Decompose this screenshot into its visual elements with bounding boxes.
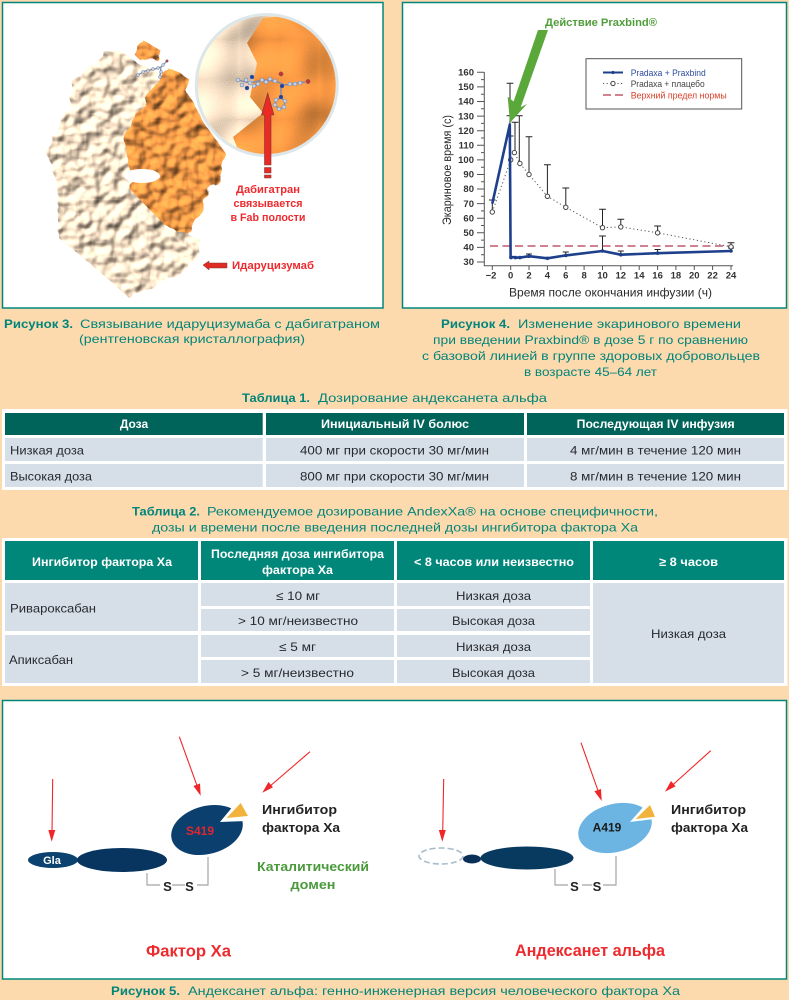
y tick labels: 30 (463, 257, 474, 268)
Gla domain: Gla (43, 855, 62, 867)
chart axes (477, 72, 733, 270)
x tick labels: −2 (486, 270, 496, 282)
table 1 rows: 800 мг при скорости 30 мг/мин (300, 470, 489, 484)
label: dabigatran binding: в Fab полости (230, 212, 306, 224)
table 2 rows: ≤ 10 мг (276, 589, 321, 603)
y tick labels: 80 (463, 184, 474, 195)
EGF domain (480, 846, 574, 870)
disulfide bond: S (593, 879, 602, 894)
table 2 rows: Высокая доза (452, 666, 535, 680)
table 2 header: Ингибитор фактора Ха (32, 555, 172, 569)
EGF domain (77, 848, 167, 872)
label: catalytic domain: Каталитический (257, 859, 369, 874)
table 2 title (132, 504, 658, 534)
line: upper limit of normal (490, 245, 730, 247)
Gla domain (28, 852, 78, 868)
y tick labels: 70 (463, 199, 474, 210)
table 1 rows (5, 438, 784, 487)
arrow: red arrow into pocket (262, 93, 274, 178)
y tick labels: 100 (458, 155, 474, 166)
table 2 rows: > 10 мг/неизвестно (238, 614, 358, 628)
table 1 rows: 4 мг/мин в течение 120 мин (570, 444, 741, 458)
x tick labels: 2 (526, 270, 532, 282)
table 1 rows: Высокая доза (10, 470, 92, 484)
table 2 rows: Низкая доза (456, 589, 531, 603)
y tick labels: 90 (463, 170, 474, 181)
y tick labels: 150 (458, 82, 474, 93)
caption: figure 5: Рисунок 5. (111, 984, 180, 998)
table 2 title: Рекомендуемое дозирование AndexXa® на основе специфичности, (207, 504, 658, 518)
table 1 title: Таблица 1. (242, 391, 310, 405)
table 2 rows: Низкая доза (456, 640, 531, 654)
diagram: factor Xa (28, 737, 369, 960)
table 2 header (5, 541, 784, 580)
catalytic domain S419 (166, 797, 250, 863)
disulfide bond: S (570, 879, 579, 894)
protein surface: idarucizumab (47, 40, 225, 297)
line: Pradaxa + Praxbind (492, 124, 733, 260)
catalytic domain A419 (573, 795, 658, 861)
label: idarucizumab: Идаруцизумаб (232, 260, 314, 272)
table 2 rows: Низкая доза (651, 627, 726, 641)
catalytic domain S419: S419 (186, 824, 214, 838)
table 2 header: Последняя доза ингибитора (211, 547, 384, 561)
table 2 header: ≥ 8 часов (659, 555, 718, 569)
y tick labels: 40 (463, 243, 474, 254)
x tick labels: 6 (563, 270, 568, 282)
table 2 rows: > 5 мг/неизвестно (241, 666, 354, 680)
table 1 title (242, 391, 547, 405)
label: factor Xa: Фактор Ха (146, 942, 232, 960)
label: inhibitor: фактора Ха (671, 820, 749, 835)
caption: figure 4: при введении Praxbind® в дозе 5 г по сравнению (433, 333, 748, 347)
label: andexanet alfa: Андексанет альфа (515, 941, 666, 960)
table 1 rows: Низкая доза (10, 444, 84, 458)
disulfide bond (147, 857, 208, 894)
caption: figure 3: Рисунок 3. (4, 317, 73, 331)
y tick labels: 50 (463, 228, 474, 239)
table 1: andexanet dosing (2, 409, 788, 490)
table 1 header: Инициальный IV болюс (321, 417, 469, 431)
panel: figure 5 factor Xa vs andexanet (2, 700, 786, 979)
legend: Pradaxa + Praxbind (631, 68, 706, 79)
catalytic domain A419: A419 (593, 820, 622, 834)
label: inhibitor (671, 802, 749, 835)
table 2 header: фактора Ха (262, 563, 333, 577)
y axis title: Экариновое время (с) (440, 115, 454, 225)
caption: figure 4: с базовой линией в группе здоровых добровольцев (422, 349, 760, 363)
inhibitor wedge (227, 803, 248, 818)
panel: figure 4 ecarin time chart (402, 2, 786, 308)
line: Pradaxa + placebo (490, 150, 733, 249)
x tick labels: 24 (726, 270, 737, 282)
table 2: recommended dosing (2, 538, 788, 686)
molecule in inset (236, 72, 310, 111)
disulfide bond (555, 856, 616, 894)
legend (586, 59, 742, 109)
label: Praxbind action: Действие Praxbind® (545, 17, 657, 29)
caption: figure 5: Андексанет альфа: генно-инженерная версия человеческого фактора Ха (188, 984, 680, 998)
label: dabigatran binding: Дабигатран (236, 184, 300, 196)
caption: figure 4: в возрасте 45–64 лет (524, 365, 658, 379)
label: catalytic domain: домен (290, 877, 336, 892)
x tick labels: 0 (508, 270, 513, 282)
y tick labels: 160 (458, 68, 474, 78)
deleted Gla domain (419, 848, 463, 864)
error bars: Praxbind (526, 236, 734, 257)
inhibitor wedge (636, 805, 655, 819)
x tick labels: 14 (634, 270, 645, 282)
x tick labels (486, 270, 737, 282)
table 2 rows: ≤ 5 мг (279, 640, 317, 654)
caption: figure 3: Связывание идаруцизумаба с дабигатраном (80, 317, 380, 331)
x tick labels: 18 (671, 270, 681, 282)
disulfide bond: S (185, 879, 194, 894)
x tick labels: 12 (616, 270, 626, 282)
table 1 rows: 400 мг при скорости 30 мг/мин (300, 444, 489, 458)
table 2 header: < 8 часов или неизвестно (414, 555, 574, 569)
caption: figure 4: Рисунок 4. (441, 317, 510, 331)
label: inhibitor: Ингибитор (671, 802, 746, 817)
arrows (48, 737, 310, 842)
y tick labels: 110 (459, 140, 474, 152)
y tick labels: 130 (458, 111, 474, 122)
inset: binding pocket close-up (194, 13, 339, 157)
y tick labels: 140 (458, 97, 474, 108)
caption: figure 3 (4, 317, 380, 346)
y tick labels: 120 (458, 126, 474, 137)
legend: Верхний предел нормы (631, 90, 727, 102)
x tick labels: 4 (545, 270, 551, 282)
label: inhibitor: Ингибитор (262, 802, 337, 817)
label: dabigatran binding (230, 184, 306, 224)
table 1 header: Последующая IV инфузия (577, 417, 735, 431)
table 2 title: Таблица 2. (132, 504, 200, 518)
y tick labels: 60 (463, 213, 474, 224)
table 2 rows (5, 583, 784, 683)
x tick labels: 8 (581, 270, 587, 282)
molecule on protein (136, 60, 168, 78)
linker domain (463, 854, 481, 864)
arrow: Praxbind action (508, 30, 548, 123)
arrows (439, 743, 711, 842)
table 1 title: Дозирование андексанета альфа (318, 391, 547, 405)
disulfide bond: S (163, 879, 172, 894)
x tick labels: 20 (689, 270, 700, 282)
x tick labels: 10 (597, 270, 608, 282)
table 1 rows: 8 мг/мин в течение 120 мин (570, 470, 741, 484)
table 2 rows: Ривароксабан (10, 602, 96, 616)
error bars: placebo (489, 83, 734, 246)
table 2 rows: Апиксабан (9, 653, 73, 667)
caption: figure 4 (422, 317, 760, 379)
y tick labels (458, 68, 474, 268)
table 1 header: Доза (120, 417, 148, 431)
diagram: andexanet alfa (419, 743, 749, 960)
label: inhibitor (262, 802, 341, 835)
label: catalytic domain (257, 859, 369, 892)
legend: Pradaxa + плацебо (631, 79, 705, 90)
caption: figure 4: Изменение экаринового времени (518, 317, 741, 331)
table 2 rows: Высокая доза (452, 614, 535, 628)
table 2 title: дозы и времени после введения последней дозы ингибитора фактора Ха (152, 520, 638, 534)
label: dabigatran binding: связывается (234, 198, 302, 210)
label: inhibitor: фактора Ха (262, 820, 341, 835)
panel: figure 3 protein structure (2, 2, 383, 308)
x tick labels: 16 (652, 270, 663, 282)
table 1 header (5, 413, 784, 435)
x tick labels: 22 (707, 270, 718, 282)
caption: figure 3: (рентгеновская кристаллография) (79, 332, 305, 346)
x axis title: Время после окончания инфузии (ч) (509, 286, 712, 300)
arrow: idarucizumab pointer (203, 261, 227, 270)
